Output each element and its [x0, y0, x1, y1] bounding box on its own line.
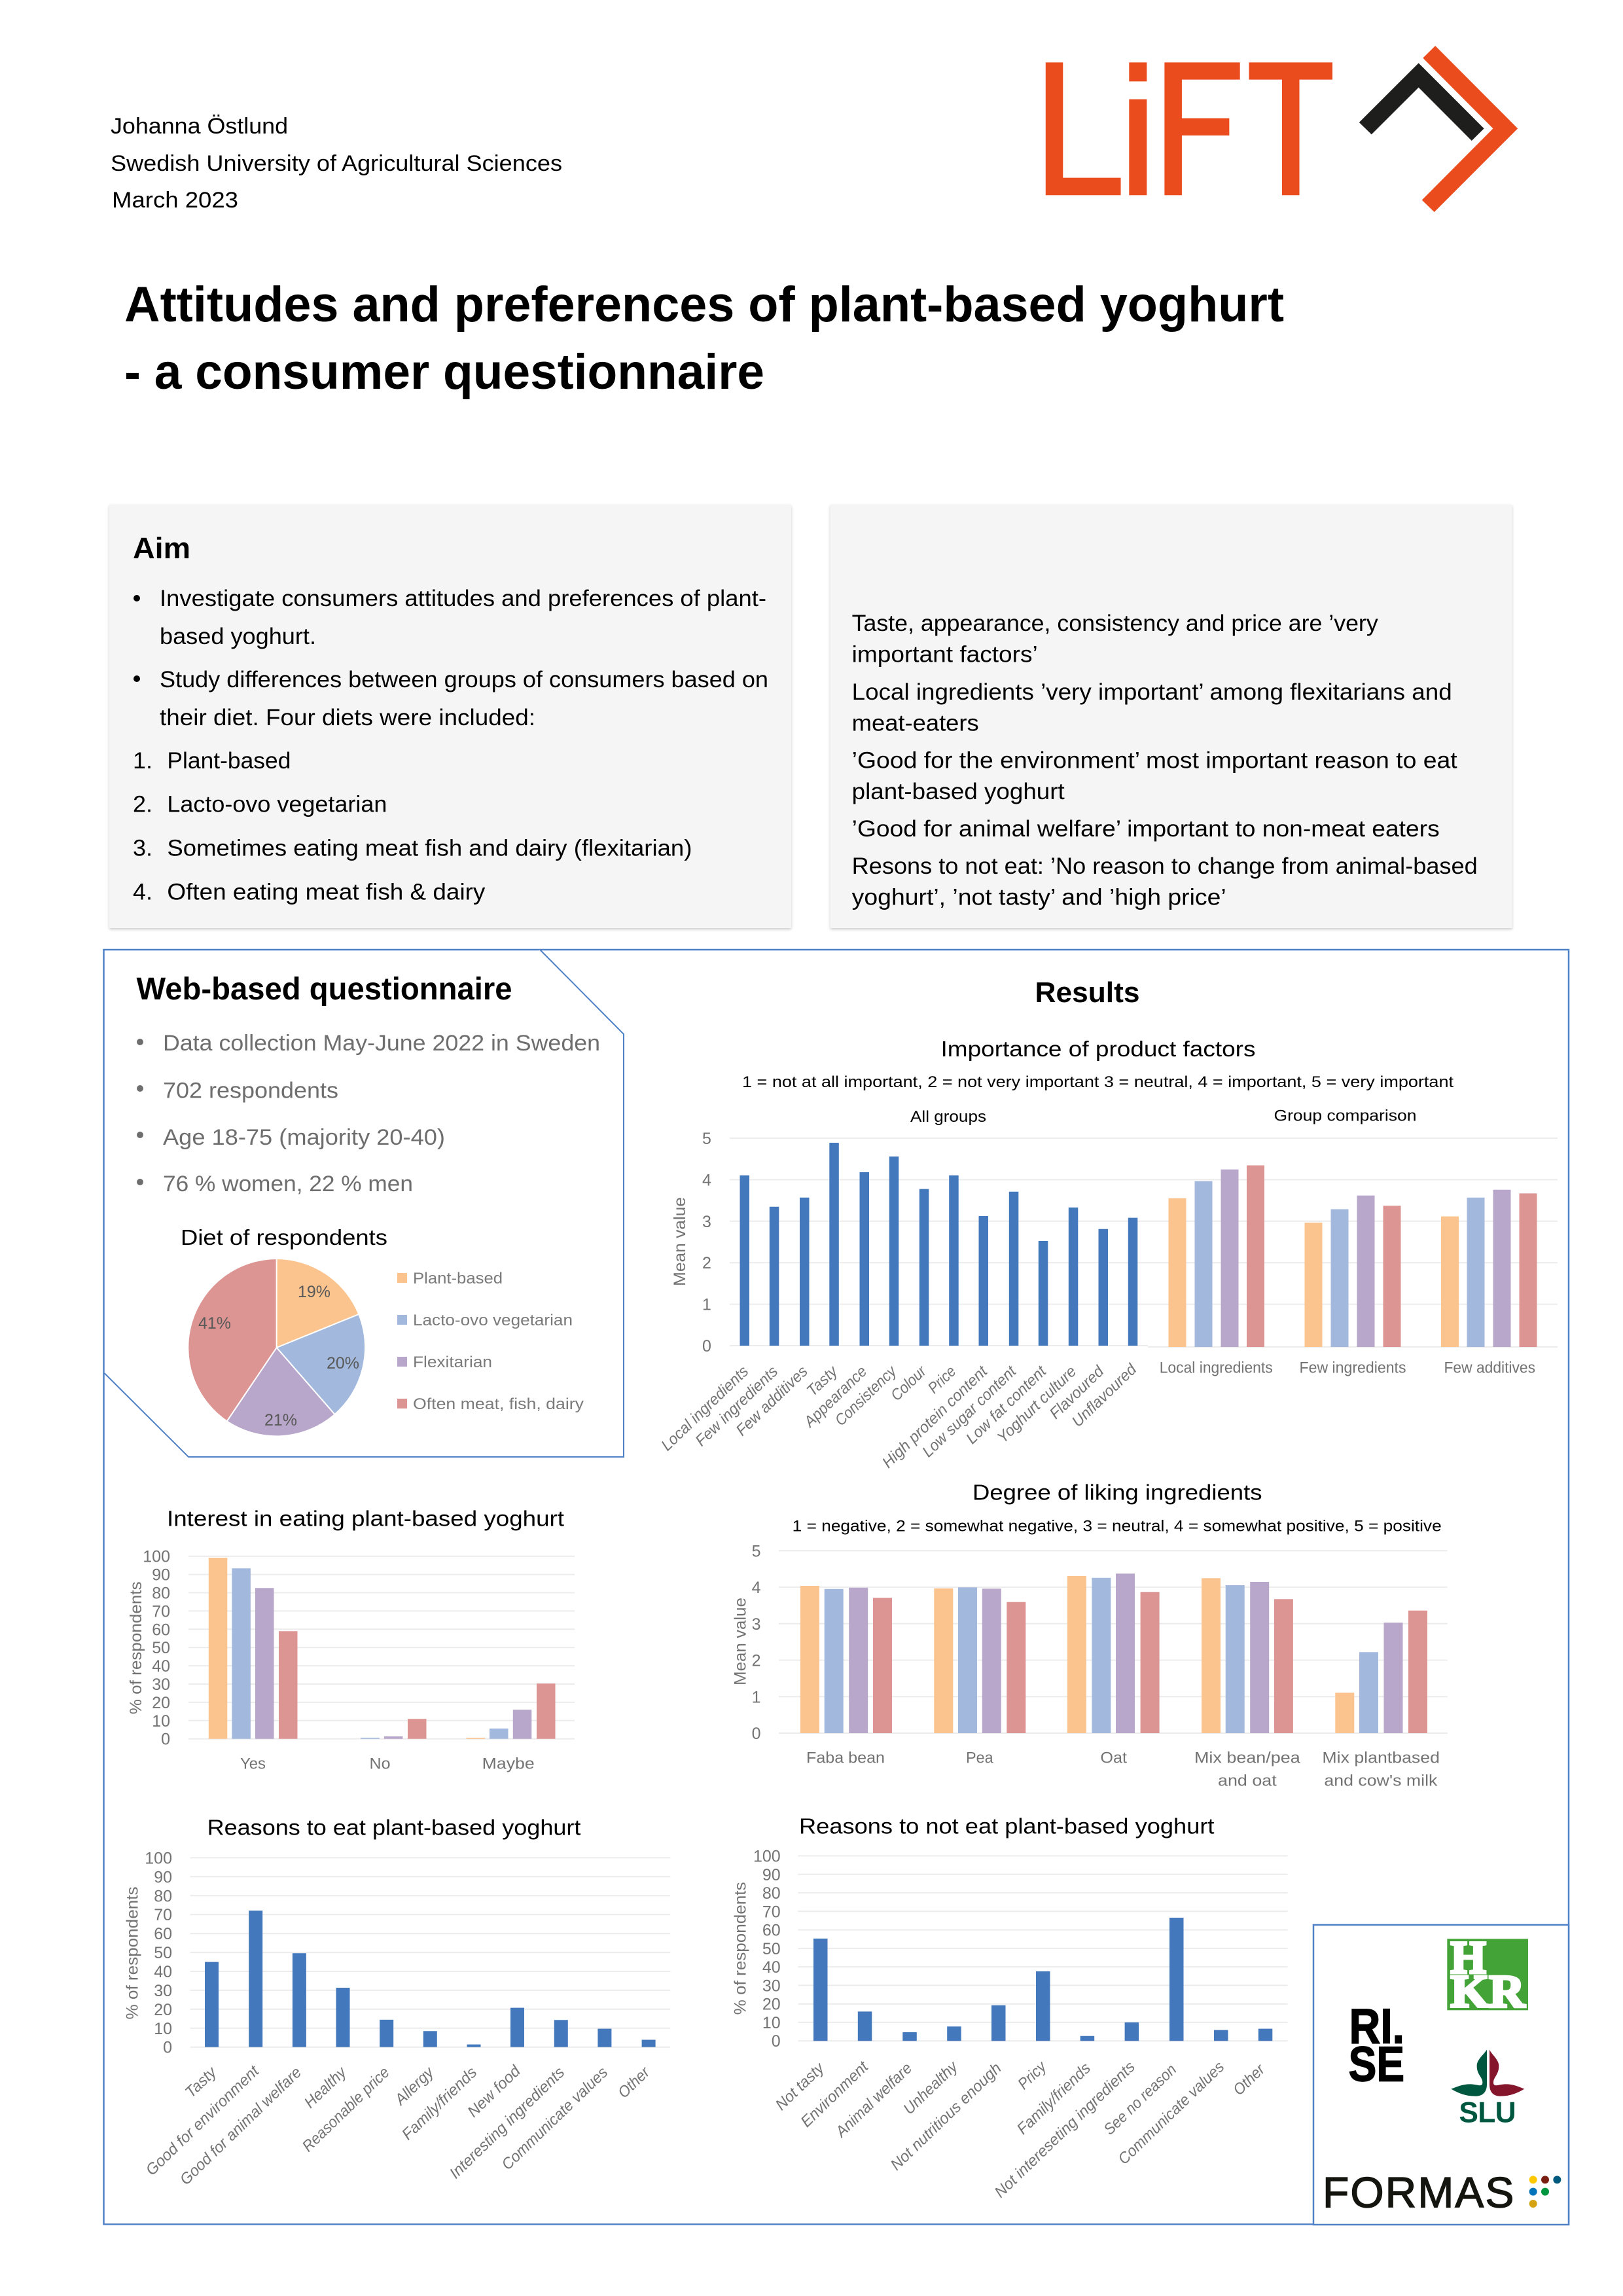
y axis: mean value: 1: [752, 1688, 761, 1706]
y axis: percent of respondents: % of respondents: [731, 1882, 749, 2015]
icon: RISE logo: RI.: [1349, 1999, 1404, 2054]
x labels: reasons to not eat: Family/friends: [1014, 2059, 1094, 2138]
x labels: all groups: Tasty: [804, 1362, 842, 1400]
y axis: percent of respondents: 80: [152, 1584, 170, 1602]
diet numbered list: Sometimes eating meat fish and dairy (flexitarian): [167, 836, 692, 861]
y axis: mean value: 0: [752, 1725, 761, 1743]
icon: FORMAS logo: FORMAS: [1323, 2168, 1514, 2217]
y axis: percent of respondents: 20: [152, 1694, 170, 1712]
x labels: reasons to not eat: Not tasty: [772, 2058, 829, 2114]
questionnaire facts: Age 18-75 (majority 20-40): [163, 1125, 445, 1150]
y axis: percent of respondents: 80: [154, 1887, 172, 1905]
chart: degree of liking ingredients: [732, 1480, 1448, 1789]
x labels: all groups: Consistency: [832, 1362, 901, 1429]
diet numbered list: [133, 748, 692, 905]
x labels: reasons to not eat: Pricy: [1014, 2057, 1050, 2093]
title: Attitudes and preferences of plant-based yoghurt: [124, 277, 1284, 332]
heading: web-based questionnaire: Web-based questionnaire: [136, 972, 512, 1007]
x labels: reasons to not eat: Unhealthy: [900, 2057, 962, 2118]
questionnaire facts: 702 respondents: [163, 1079, 338, 1103]
questionnaire facts: [137, 1031, 600, 1196]
y axis: percent of respondents: 60: [154, 1925, 172, 1943]
x labels: interest: Maybe: [482, 1755, 535, 1773]
icon: SLU logo: [1451, 2050, 1524, 2129]
y axis: mean value: 3: [702, 1213, 711, 1231]
author block: Johanna Östlund: [111, 114, 288, 139]
x labels: ingredients: and oat: [1218, 1772, 1277, 1789]
diet numbered list: Lacto-ovo vegetarian: [167, 792, 387, 817]
bars: reasons to not eat: [813, 1918, 1272, 2041]
panel: conclusions: Local ingredients ’very important’ among flexitarians and: [852, 679, 1452, 705]
x labels: interest: Yes: [240, 1755, 266, 1773]
y axis: mean value: 3: [752, 1615, 761, 1634]
x labels: interest: [240, 1755, 535, 1773]
panel: conclusions: plant-based yoghurt: [852, 779, 1065, 804]
x labels: ingredients: Mix bean/pea: [1194, 1749, 1300, 1767]
title: - a consumer questionnaire: [124, 344, 764, 400]
chart: importance of product factors: Group comparison: [1274, 1107, 1416, 1124]
x labels: ingredients: [806, 1749, 1440, 1789]
y axis: mean value: 2: [702, 1254, 711, 1272]
y axis: percent of respondents: 30: [762, 1977, 781, 1995]
y axis: percent of respondents: 20: [762, 1996, 781, 2014]
x labels: group comparison: Local ingredients: [1160, 1359, 1273, 1377]
x labels: all groups: Low sugar content: [919, 1362, 1020, 1461]
panel: conclusions: important factors’: [852, 641, 1038, 668]
y axis: percent of respondents: 60: [762, 1922, 781, 1940]
y axis: percent of respondents: 70: [762, 1903, 781, 1921]
x labels: reasons to eat: Reasonable price: [299, 2064, 393, 2155]
y axis: percent of respondents: 50: [762, 1940, 781, 1958]
y axis: mean value: 2: [752, 1652, 761, 1670]
x labels: all groups: [658, 1360, 1141, 1472]
chart: reasons to not eat plant-based yoghurt: Reasons to not eat plant-based yoghurt: [799, 1814, 1215, 1838]
y axis: percent of respondents: 40: [762, 1958, 781, 1977]
pie legend: [397, 1270, 584, 1413]
x labels: ingredients: Oat: [1100, 1749, 1127, 1767]
x labels: reasons to eat: Allergy: [391, 2063, 438, 2109]
chart: reasons to not eat plant-based yoghurt: [731, 1814, 1288, 2201]
panel: conclusions: ’Good for animal welfare’ important to non-meat eaters: [852, 816, 1440, 842]
pie chart: diet of respondents: 41%: [198, 1314, 231, 1333]
panel: conclusions: Taste, appearance, consistency and price are ’very: [852, 611, 1378, 636]
diet numbered list: 2.: [133, 792, 152, 817]
aim bullet list: their diet. Four diets were included:: [160, 705, 535, 730]
diet numbered list: Often eating meat fish & dairy: [167, 880, 486, 905]
pie legend: Lacto-ovo vegetarian: [413, 1312, 573, 1329]
y axis: percent of respondents: 50: [152, 1639, 170, 1657]
panel: conclusions: ’Good for the environment’ most important reason to eat: [852, 747, 1457, 773]
y axis: percent of respondents: 20: [154, 2001, 172, 2019]
x labels: all groups: High protein content: [879, 1362, 991, 1472]
icon: LiFT logo: [1046, 46, 1518, 212]
x labels: all groups: Low fat content: [963, 1362, 1050, 1448]
y axis: percent of respondents: % of respondents: [124, 1886, 142, 2020]
y axis: percent of respondents: 90: [762, 1866, 781, 1884]
x labels: all groups: Few additives: [732, 1363, 812, 1439]
x labels: reasons to eat: New food: [464, 2062, 524, 2121]
heading: results: Results: [1035, 977, 1140, 1009]
y axis: mean value: 1: [702, 1296, 711, 1314]
x labels: all groups: Colour: [887, 1362, 931, 1405]
panel: aim: [109, 505, 791, 928]
aim bullet list: based yoghurt.: [160, 624, 316, 649]
panel: results outer frame: [103, 950, 1569, 2224]
x labels: ingredients: and cow's milk: [1324, 1772, 1438, 1789]
x labels: group comparison: Few ingredients: [1300, 1359, 1406, 1377]
y axis: mean value: 0: [702, 1337, 711, 1355]
bars: group comparison: [1169, 1165, 1537, 1347]
y axis: mean value: 4: [752, 1579, 761, 1597]
x labels: reasons to eat: [143, 2062, 654, 2189]
y axis: percent of respondents: [127, 1548, 170, 1749]
chart: interest in eating plant-based yoghurt: [127, 1507, 575, 1773]
author block: [111, 114, 562, 213]
x labels: ingredients: Faba bean: [806, 1749, 885, 1767]
x labels: reasons to not eat: Environment: [797, 2058, 872, 2131]
y axis: mean value: Mean value: [732, 1598, 750, 1685]
x labels: reasons to eat: Other: [615, 2063, 654, 2102]
x labels: reasons to not eat: Not nutritious enough: [887, 2059, 1005, 2174]
chart: importance of product factors: 1 = not at all important, 2 = not very important 3 = neutral, 4 = important, 5 = very important: [742, 1073, 1454, 1091]
bars: interest: [209, 1558, 555, 1739]
x labels: reasons to eat: Family/friends: [399, 2064, 480, 2144]
icon: HKR logo: [1447, 1933, 1528, 2017]
bars: reasons to eat: [205, 1910, 656, 2047]
y axis: percent of respondents: [124, 1849, 172, 2057]
y axis: percent of respondents: 70: [154, 1906, 172, 1924]
x labels: reasons to eat: Tasty: [182, 2063, 221, 2102]
questionnaire facts: Data collection May-June 2022 in Sweden: [163, 1031, 600, 1056]
chart: degree of liking ingredients: Degree of liking ingredients: [972, 1480, 1262, 1505]
y axis: percent of respondents: 0: [163, 2039, 172, 2057]
y axis: percent of respondents: 60: [152, 1621, 170, 1639]
x labels: reasons to not eat: Other: [1230, 2060, 1269, 2099]
y axis: percent of respondents: 0: [772, 2032, 781, 2051]
x labels: reasons to eat: Good for environment: [143, 2062, 263, 2179]
x labels: interest: No: [369, 1755, 390, 1773]
chart: reasons to eat plant-based yoghurt: [124, 1816, 670, 2189]
x labels: reasons to not eat: Not intereseting ingredients: [991, 2058, 1139, 2201]
chart: interest in eating plant-based yoghurt: Interest in eating plant-based yoghurt: [167, 1507, 564, 1531]
y axis: mean value: 4: [702, 1171, 711, 1189]
diet numbered list: 3.: [133, 836, 152, 861]
y axis: mean value: 5: [702, 1130, 711, 1148]
x labels: reasons to not eat: [772, 2057, 1269, 2201]
y axis: percent of respondents: [731, 1847, 781, 2051]
aim bullet list: Investigate consumers attitudes and preferences of plant-: [160, 586, 766, 611]
x labels: group comparison: Few additives: [1444, 1359, 1535, 1377]
diet numbered list: 4.: [133, 880, 152, 905]
panel: conclusions: yoghurt’, ’not tasty’ and ’high price’: [852, 885, 1226, 910]
questionnaire facts: 76 % women, 22 % men: [163, 1172, 413, 1196]
x labels: reasons to eat: Good for animal welfare: [177, 2064, 305, 2189]
x labels: all groups: Unflavoured: [1069, 1360, 1141, 1431]
diet numbered list: Plant-based: [167, 748, 291, 774]
pie chart: diet of respondents: 20%: [327, 1354, 359, 1372]
chart: importance of product factors: Importance of product factors: [941, 1037, 1255, 1061]
y axis: percent of respondents: 100: [753, 1847, 781, 1865]
x labels: reasons to not eat: Communicate values: [1115, 2058, 1228, 2168]
y axis: percent of respondents: 40: [154, 1963, 172, 1981]
x labels: reasons to not eat: Animal welfare: [831, 2059, 916, 2142]
pie chart: diet of respondents: 21%: [264, 1411, 297, 1429]
icon: HKR logo: KR: [1451, 1966, 1525, 2017]
x labels: all groups: Yoghurt culture: [993, 1363, 1080, 1446]
y axis: mean value: [732, 1542, 761, 1743]
x labels: reasons to eat: Healthy: [301, 2063, 351, 2111]
panel: conclusions: Resons to not eat: ’No reason to change from animal-based: [852, 853, 1478, 879]
y axis: mean value: [671, 1130, 711, 1355]
y axis: percent of respondents: 40: [152, 1657, 170, 1676]
panel: conclusions: [830, 505, 1512, 928]
x labels: reasons to eat: Interesting ingredients: [446, 2064, 568, 2182]
y axis: percent of respondents: 50: [154, 1944, 172, 1962]
pie chart: diet of respondents: Diet of respondents: [181, 1225, 387, 1249]
diet numbered list: 1.: [133, 748, 152, 774]
y axis: percent of respondents: 70: [152, 1602, 170, 1621]
pie legend: Flexitarian: [413, 1354, 492, 1371]
y axis: percent of respondents: 10: [154, 2020, 172, 2038]
pie legend: Often meat, fish, dairy: [413, 1395, 584, 1413]
y axis: percent of respondents: 30: [154, 1982, 172, 2000]
y axis: mean value: 5: [752, 1542, 761, 1560]
x labels: all groups: Local ingredients: [658, 1363, 752, 1454]
panel: web-based questionnaire: [103, 950, 624, 1457]
title: [124, 277, 1284, 400]
chart: reasons to eat plant-based yoghurt: Reasons to eat plant-based yoghurt: [207, 1816, 580, 1839]
icon: RISE logo: SE: [1349, 2036, 1404, 2091]
y axis: percent of respondents: 30: [152, 1676, 170, 1694]
icon: HKR logo: H: [1451, 1933, 1486, 1984]
icon: RISE logo: [1349, 1999, 1404, 2091]
pie chart: diet of respondents: 19%: [298, 1283, 330, 1301]
y axis: percent of respondents: 10: [762, 2014, 781, 2032]
y axis: percent of respondents: 100: [143, 1548, 170, 1566]
x labels: ingredients: Pea: [966, 1749, 993, 1767]
x labels: all groups: Flavoured: [1046, 1362, 1108, 1423]
bars: ingredients: [800, 1573, 1427, 1733]
x labels: reasons to eat: Communicate values: [498, 2064, 611, 2174]
heading: aim: Aim: [133, 531, 190, 565]
x labels: all groups: Price: [925, 1363, 959, 1397]
aim bullet list: [134, 586, 768, 730]
panel: partner logos: [1313, 1925, 1569, 2225]
panel: conclusions: meat-eaters: [852, 711, 979, 736]
y axis: percent of respondents: 90: [152, 1566, 170, 1585]
x labels: reasons to not eat: See no reason: [1101, 2061, 1180, 2138]
y axis: percent of respondents: 80: [762, 1884, 781, 1903]
author block: Swedish University of Agricultural Sciences: [111, 151, 562, 176]
author block: March 2023: [112, 188, 238, 213]
y axis: percent of respondents: 0: [161, 1731, 170, 1749]
chart: importance of product factors: All groups: [910, 1108, 986, 1126]
x labels: ingredients: Mix plantbased: [1322, 1749, 1440, 1767]
chart: importance of product factors: [658, 1037, 1558, 1472]
bars: all groups: [740, 1143, 1137, 1346]
pie chart: diet of respondents: [181, 1225, 584, 1436]
y axis: percent of respondents: 10: [152, 1712, 170, 1731]
chart: degree of liking ingredients: 1 = negative, 2 = somewhat negative, 3 = neutral, 4 = somewhat positive, 5 = positive: [793, 1517, 1442, 1535]
pie legend: Plant-based: [413, 1270, 503, 1287]
y axis: percent of respondents: 100: [145, 1849, 172, 1867]
y axis: mean value: Mean value: [671, 1197, 689, 1286]
y axis: percent of respondents: 90: [154, 1868, 172, 1886]
aim bullet list: Study differences between groups of consumers based on: [160, 667, 768, 692]
y axis: percent of respondents: % of respondents: [127, 1581, 145, 1714]
x labels: all groups: Appearance: [800, 1363, 870, 1431]
x labels: group comparison: [1160, 1359, 1535, 1377]
x labels: all groups: Few ingredients: [692, 1363, 781, 1450]
icon: SLU logo: SLU: [1459, 2097, 1516, 2129]
